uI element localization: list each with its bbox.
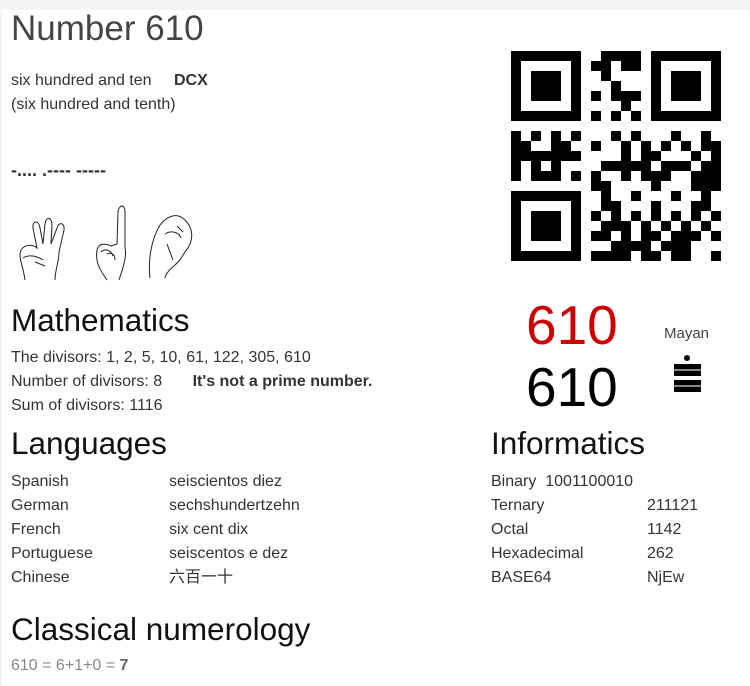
title: Number 610 xyxy=(11,9,204,48)
table: informatics: 211121 xyxy=(647,497,698,514)
heading: Languages: Languages xyxy=(11,425,167,461)
table: languages: seiscentos e dez xyxy=(169,545,288,562)
table: informatics: Binary 1001100010 xyxy=(491,473,633,490)
text: math facts: The divisors: 1, 2, 5, 10, 61, 122, 305, 610 xyxy=(11,349,311,366)
table: languages: seiscientos diez xyxy=(169,473,282,490)
Mayan numeral xyxy=(664,325,709,392)
table: informatics xyxy=(491,473,698,586)
table: languages: 六百一十 xyxy=(169,569,233,586)
table: informatics: 262 xyxy=(647,545,674,562)
black number: 610 xyxy=(526,356,618,418)
text: numerology: 610 = 6+1+0 = 7 xyxy=(11,657,128,674)
text: math facts xyxy=(11,349,372,414)
table: languages xyxy=(11,473,300,586)
text: math facts: Sum of divisors: 1116 xyxy=(11,397,162,414)
table: languages: six cent dix xyxy=(169,521,248,538)
QR code xyxy=(511,51,721,261)
table: informatics: Hexadecimal xyxy=(491,545,583,562)
heading: Classical numerology: Classical numerology xyxy=(11,611,310,647)
table: informatics: NjEw xyxy=(647,569,684,586)
text: names: six hundred and ten DCX xyxy=(11,72,208,89)
text: names xyxy=(11,72,208,113)
text: math facts: Number of divisors: 8 It's not a prime number. xyxy=(11,373,372,390)
table: languages: Chinese xyxy=(11,569,70,586)
table: languages: German xyxy=(11,497,69,514)
text: names: (six hundred and tenth) xyxy=(11,96,176,113)
table: informatics: Ternary xyxy=(491,497,544,514)
heading: Mathematics: Mathematics xyxy=(11,302,190,338)
table: informatics: Octal xyxy=(491,521,528,538)
table: informatics: BASE64 xyxy=(491,569,551,586)
red number: 610 xyxy=(526,294,618,356)
Mayan numeral: Mayan xyxy=(664,325,709,342)
icon: sign language hands xyxy=(20,206,192,280)
table: languages: Portuguese xyxy=(11,545,93,562)
table: languages: French xyxy=(11,521,61,538)
heading: Informatics: Informatics xyxy=(491,425,645,461)
table: informatics: 1142 xyxy=(647,521,681,538)
table: languages: sechshundertzehn xyxy=(169,497,300,514)
table: languages: Spanish xyxy=(11,473,69,490)
text: morse: -.... .---- ----- xyxy=(11,160,106,180)
